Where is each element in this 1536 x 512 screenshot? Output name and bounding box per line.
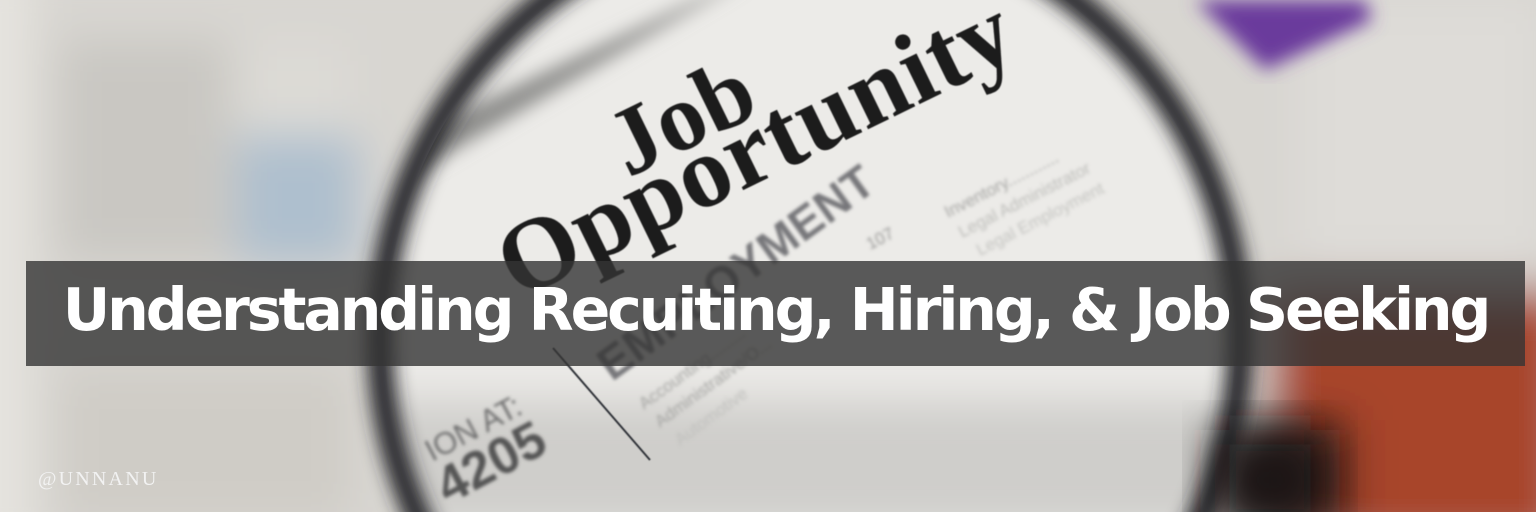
classified listing blurred text: Accounting......... — [635, 323, 749, 413]
blurred purple tag — [1195, 0, 1372, 70]
location text: ION AT: — [419, 388, 528, 468]
heading: Job Opportunity: Job — [590, 35, 771, 197]
classified listing blurred text — [640, 160, 1105, 428]
classified listing blurred text: Legal Administrator — [955, 158, 1094, 242]
classified listing blurred text: Automotive — [671, 384, 751, 449]
classified listing blurred text: 107 — [863, 224, 897, 254]
magnifying glass ring — [380, 0, 1240, 512]
page fold shadow — [420, 0, 726, 176]
watermark handle: @UNNANU — [38, 468, 158, 490]
bottom right dark handle area — [1215, 430, 1325, 512]
lower lens soft shadow — [360, 400, 1260, 512]
title: Understanding Recuiting, Hiring, & Job Seeking — [63, 276, 1488, 344]
lens interior paper — [360, 0, 1260, 512]
vertical rule — [553, 348, 650, 460]
classified listing blurred text: Administrative/O... — [651, 334, 775, 431]
title band — [26, 261, 1525, 366]
classified listing blurred text: Inventory............ — [941, 148, 1061, 222]
subheading: Employment: EMPLOYMENT — [587, 154, 885, 390]
classified listing blurred text: Legal Employment — [973, 179, 1108, 260]
